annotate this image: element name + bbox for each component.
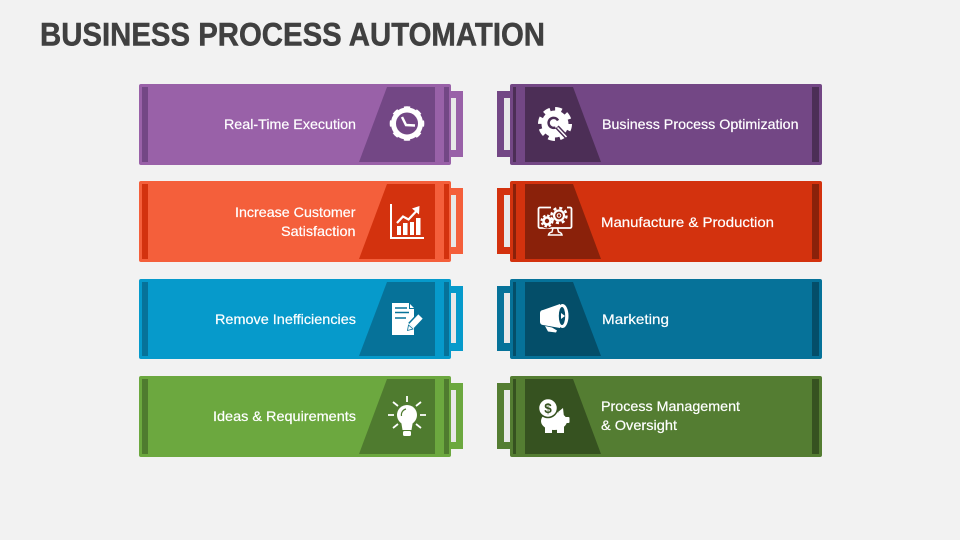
panel: Ideas & Requirements [139, 376, 463, 457]
panel: Manufacture & Production [497, 181, 822, 262]
icon: growth chart [390, 204, 424, 239]
icon: piggy bank with coin [538, 398, 570, 433]
label: Marketing [602, 311, 669, 327]
label: & Oversight [601, 417, 677, 433]
label: Manufacture & Production [601, 214, 774, 230]
panel: Real-Time Execution [139, 84, 463, 165]
label [235, 204, 356, 239]
label: Remove Inefficiencies [215, 311, 356, 327]
icon: megaphone [540, 304, 568, 332]
panel: Increase Customer Satisfaction [139, 181, 463, 262]
icon: monitor with gears [538, 206, 572, 235]
icon: gear and wrench [540, 110, 570, 138]
panel: Remove Inefficiencies [139, 279, 463, 359]
panel: Business Process Optimization [497, 84, 822, 165]
icon: clock gear [391, 108, 423, 139]
label: Increase Customer [235, 204, 356, 220]
panel: Process Management & Oversight [497, 376, 822, 457]
label: Process Management [601, 398, 740, 414]
icon: document and pen [392, 303, 420, 335]
label: Real-Time Execution [224, 116, 356, 132]
icon: piggy bank with coin: $ [544, 401, 552, 416]
label: Satisfaction [281, 223, 356, 239]
label: Ideas & Requirements [213, 408, 356, 424]
label [601, 398, 740, 433]
label: Business Process Optimization [602, 116, 798, 132]
icon: light bulb [388, 396, 426, 436]
title: BUSINESS PROCESS AUTOMATION [40, 16, 545, 52]
panel: Marketing [497, 279, 822, 359]
